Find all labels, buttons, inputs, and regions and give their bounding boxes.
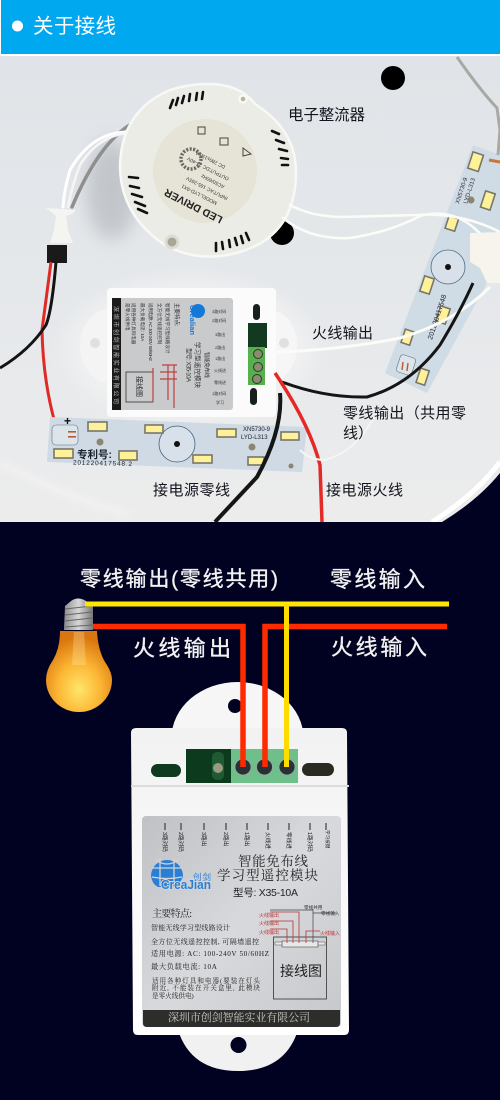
mounting tabs [80, 309, 140, 383]
wiring diagram: 火线输出 [259, 920, 279, 927]
LED strip: bottom: XN5730-9 [243, 427, 271, 433]
wires: module outputs [215, 283, 490, 522]
logo [151, 858, 211, 892]
features: 主要特点: [152, 907, 192, 920]
LED strip: bottom: 201220417548.2 [73, 460, 132, 468]
rotated features: 智能无线学习型线路设计 [164, 303, 171, 354]
rotated features: 是零火线供电 [124, 303, 131, 331]
rotated features: 主要特点: [173, 303, 181, 327]
logo: CreaJian [161, 877, 211, 892]
label icons [198, 127, 251, 156]
wiring diagram: 零线输入 [321, 910, 340, 917]
wiring diagram: 火线输入 [320, 930, 340, 937]
label ticks: 零线进 [214, 379, 226, 385]
logo: 创剑 [193, 872, 211, 882]
label ticks: 火线进 [214, 367, 226, 373]
module in photo: Crealian [188, 305, 195, 335]
grey label: 2路出 [222, 832, 230, 846]
rotated features: 适用电源: AC 100-240V 50/60HZ [147, 303, 154, 361]
LED strip: bottom [47, 414, 307, 472]
rotated module title: 智能免布线 [203, 352, 211, 378]
rotated module title: 学习型遥控模块 [194, 342, 202, 388]
rotated module title: 型号: X35-10A [184, 348, 192, 382]
wiring diagram [259, 904, 340, 999]
label ticks: 1路对码 [212, 390, 226, 396]
features: 全方位无线遥控控制, 可隔墙遥控 [151, 937, 259, 946]
features: 是零火线供电) [152, 991, 194, 1000]
wiring diagram: 零线共用 [304, 904, 323, 911]
label: 火线输入: 火线输入 [331, 635, 427, 660]
wires: driver right side [283, 205, 500, 238]
rotated features: 适用各种灯具和电器 [130, 303, 137, 345]
label text, upside down [164, 152, 228, 224]
module: tab bottom [178, 1030, 298, 1071]
grey label: 火线进 [264, 832, 272, 849]
header bar [0, 0, 500, 56]
label: 电子整流器: 电子整流器 [288, 106, 365, 124]
grey label: 2路对码 [177, 832, 185, 852]
label text, upside down: OUTPUT:DC 24-40V [186, 155, 230, 181]
label ticks: 3路出 [215, 331, 225, 337]
module in photo: 接线图 [135, 376, 144, 397]
label: 零线输出 共用零线: 线） [343, 425, 373, 442]
wires: red and black from connector [0, 262, 56, 423]
slot right [302, 763, 334, 776]
icon: header bullet [12, 20, 23, 32]
wiring diagram: 火线输出 [259, 912, 279, 919]
label: 火线输出: 火线输出 [312, 325, 373, 342]
grey label: 1路出 [243, 832, 251, 846]
wiring diagram: 接线图 [280, 963, 322, 979]
grey label: 1路对码 [306, 832, 314, 852]
label: 火线输出: 火线输出 [133, 636, 231, 661]
features: 适用电源: AC: 100-240V 50/60HZ [151, 949, 269, 958]
label ticks [212, 308, 226, 405]
label ticks: 2路对码 [212, 317, 226, 323]
wires: top right [457, 57, 500, 162]
grey label [142, 816, 341, 1027]
logo [191, 304, 205, 318]
label text, upside down: AC50/60Hz [200, 172, 226, 189]
features [151, 907, 269, 1000]
rotated features [124, 303, 181, 361]
label: 接电源零线: 接电源零线 [153, 482, 230, 499]
label text, upside down: MODEL:LYD-9X1 [181, 182, 218, 206]
grey label: 3路对码 [161, 832, 169, 852]
label: 接电源火线: 接电源火线 [326, 482, 403, 499]
terminal block [186, 749, 298, 783]
features: 附近, 不能装在开关盒里, 此模块 [152, 983, 260, 992]
icon: mounting holes [270, 66, 405, 245]
connector [46, 208, 76, 263]
grey label: 3路出 [200, 832, 208, 846]
panel: lamp photo [0, 56, 500, 522]
label text, upside down: LED DRIVER [162, 186, 225, 225]
model: 型号: X35-10A [233, 886, 298, 899]
wires: diagram [85, 602, 449, 767]
features: 智能无线学习型线路设计 [151, 923, 230, 932]
LED strip: right: 201220417548 [427, 294, 448, 341]
LED strip: bottom: LYD-L313 [241, 435, 268, 441]
slots [253, 304, 260, 320]
LED strip: bottom: + [64, 414, 71, 428]
label text, upside down: DC 280±15mA [194, 149, 226, 169]
rotated module title [186, 342, 210, 388]
features: 最大负载电流: 10A [151, 962, 218, 971]
LED driver [120, 84, 296, 257]
label text, upside down: INPUT:AC 165-265V [185, 175, 229, 201]
heading: 关于接线 [33, 15, 116, 38]
rotated features: 全方位无线遥控控制 [156, 303, 163, 345]
LED strip: right: LYD-L313 [463, 177, 477, 205]
grey label: 学习型遥控模块 [217, 867, 318, 883]
wire nut [470, 232, 500, 283]
terminal [248, 323, 267, 348]
screws [240, 96, 246, 102]
company band text: 深圳市创剑智能实业有限公司 [168, 1010, 310, 1024]
features: 适用各种灯具和电器(要装在灯头 [152, 976, 260, 985]
label ticks: 1路出 [215, 355, 225, 361]
label: 零线输出 共用零线 [343, 405, 466, 442]
icon: light bulb [46, 598, 112, 712]
label ticks: 3路对码 [212, 308, 226, 314]
product title: 智能免布线 [238, 853, 308, 869]
wiring diagram [126, 372, 153, 402]
vents [129, 92, 288, 251]
module: tab top [172, 682, 304, 794]
rotated features: 最大负载电流: 10A [139, 303, 146, 342]
label ticks: 学习 [216, 399, 224, 405]
black band text: 深圳市创剑智能实业有限公司 [112, 306, 120, 404]
PCB text right: XN5730-9 [455, 176, 469, 205]
module: body [131, 728, 349, 1035]
wiring diagram: 火线输出 [259, 929, 279, 936]
logo seal [181, 149, 201, 169]
grey label: 零线进 [285, 832, 293, 849]
label ticks: 2路出 [215, 344, 225, 350]
label: 零线输入: 零线输入 [330, 567, 425, 592]
label: 零线输出 共用零线: 零线输出（共用零 [343, 405, 466, 422]
PCB patent text: 专利号: [77, 448, 112, 461]
label: 零线输出(零线共用): 零线输出(零线共用) [80, 568, 278, 591]
pin labels [165, 823, 326, 830]
grey label: 学习按键 [324, 830, 331, 849]
module in photo [80, 288, 297, 417]
LED strip: right [385, 145, 500, 393]
slot left [151, 764, 181, 777]
wires: driver left side [63, 122, 135, 207]
